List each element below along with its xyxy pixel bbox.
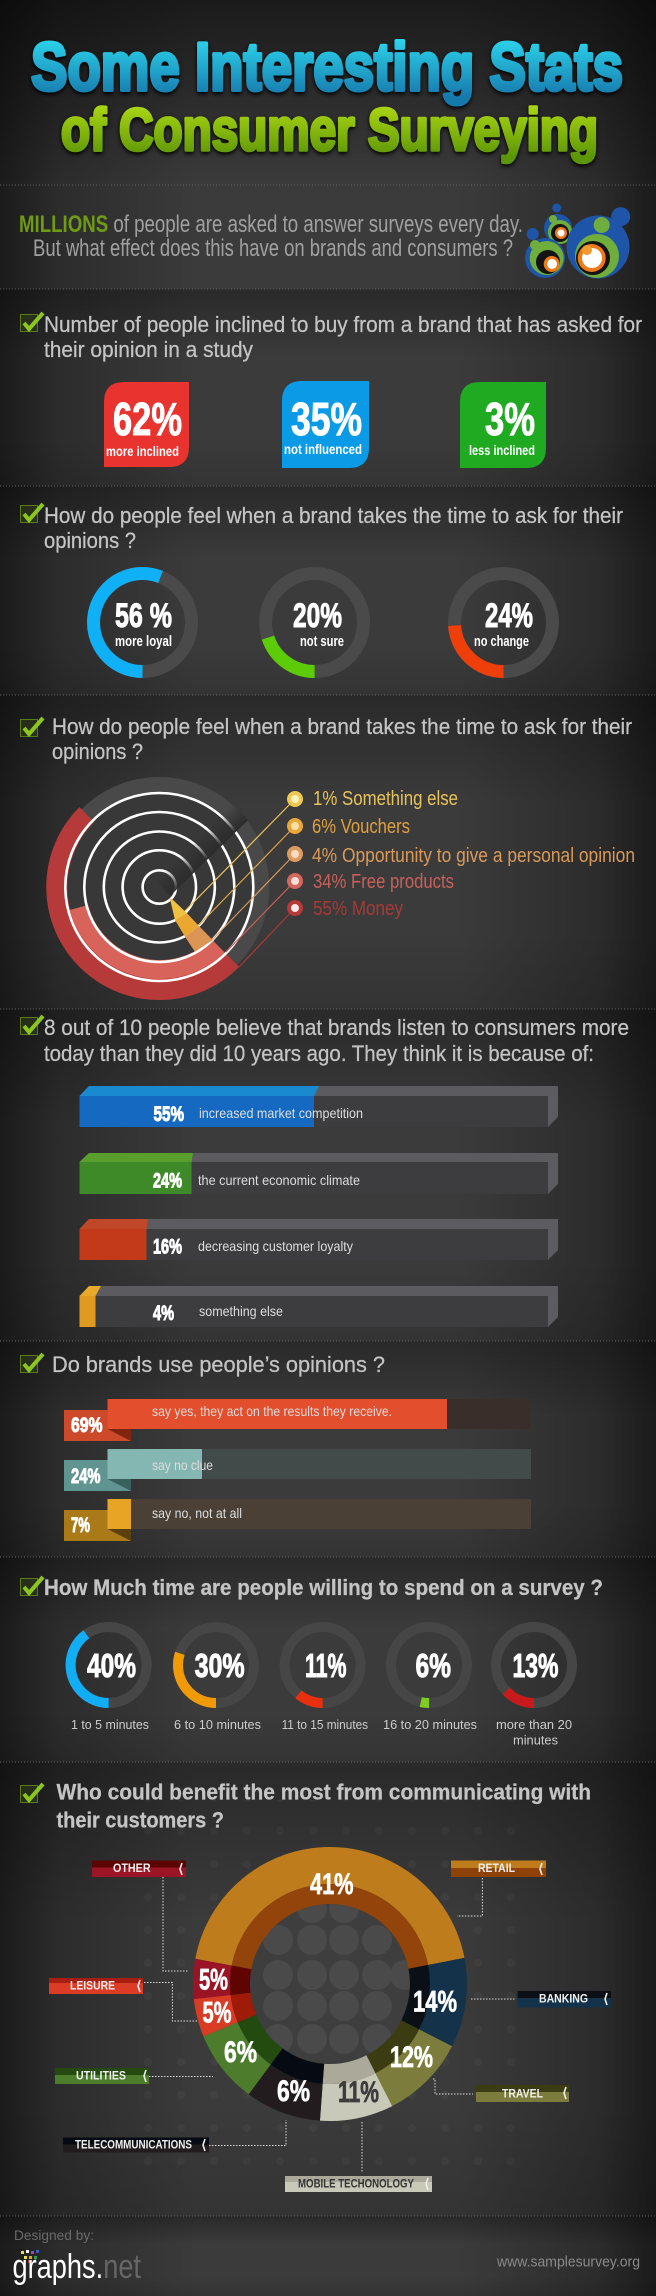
tile: 35% not influenced xyxy=(282,381,369,468)
donut chart: 5% xyxy=(202,1996,232,2030)
ring: 56% more loyal: 56 % xyxy=(115,597,172,635)
heading: How Much time are people willing to spend on a survey ? xyxy=(44,1575,603,1600)
donut chart xyxy=(199,1866,457,2109)
ring: 56% more loyal xyxy=(94,574,192,672)
ring: 40% xyxy=(71,1627,149,1732)
icon: check mark xyxy=(20,1354,43,1372)
ring: 40%: 1 to 5 minutes xyxy=(71,1717,149,1732)
ring: 11% xyxy=(282,1627,369,1732)
bar: 16%: decreasing customer loyalty xyxy=(198,1238,353,1254)
ring: 6%: 16 to 20 minutes xyxy=(383,1717,477,1732)
legend: 1% Something else xyxy=(313,788,458,810)
heading: opinions ? xyxy=(44,528,136,553)
heading xyxy=(44,503,623,553)
heading: Do brands use people’s opinions ? xyxy=(52,1352,385,1377)
ribbon: 69%: say yes, they act on the results they receive. xyxy=(152,1403,392,1419)
ring: 20% not sure xyxy=(266,574,364,672)
legend: 55% Money xyxy=(313,898,403,920)
bar: 55%: 55% xyxy=(154,1103,184,1126)
ring: 13% xyxy=(496,1627,572,1748)
bar: 4%: 4% xyxy=(153,1302,174,1325)
heading: How do people feel when a brand takes the time to ask for their xyxy=(52,714,632,739)
label: leisure: LEISURE xyxy=(70,1981,115,1993)
label: utilities xyxy=(55,2068,149,2084)
ring: 11%: 11 to 15 minutes xyxy=(282,1717,369,1732)
label: telecommunications: TELECOMMUNICATIONS xyxy=(75,2140,192,2152)
bar: 24%: the current economic climate xyxy=(198,1172,360,1188)
heading: Who could benefit the most from communicating with xyxy=(56,1780,591,1804)
panel: inclined to buy xyxy=(20,312,642,468)
ribbon: 7%: 7% xyxy=(71,1514,90,1537)
target chart xyxy=(49,777,295,997)
ribbon: 24%: say no clue xyxy=(152,1457,213,1473)
ring: 24% no change: 24% xyxy=(485,597,533,635)
label: mobile technology: MOBILE TECHONOLOGY xyxy=(298,2179,414,2191)
ring: 40%: 40% xyxy=(87,1647,136,1684)
ribbon: 69% xyxy=(64,1399,530,1441)
connector lines xyxy=(144,1877,516,2173)
heading: today than they did 10 years ago. They think it is because of: xyxy=(44,1041,594,1066)
heading: How do people feel when a brand takes the time to ask for their xyxy=(44,503,623,528)
tile: 3% less inclined: 3% xyxy=(485,393,535,445)
website: www.samplesurvey.org xyxy=(496,2254,640,2271)
icon: check mark xyxy=(20,1577,43,1596)
icon: check mark xyxy=(20,1016,43,1034)
legend: 34% Free products xyxy=(313,871,454,893)
tile: 3% less inclined: less inclined xyxy=(469,442,535,458)
heading xyxy=(44,312,642,362)
heading: their customers ? xyxy=(56,1808,224,1833)
panel: how people feel rings xyxy=(20,503,623,672)
ribbon: 24%: 24% xyxy=(71,1465,101,1488)
ring: 30% xyxy=(174,1627,261,1732)
bar: 16% xyxy=(80,1219,558,1260)
ring: 13%: more than 20 xyxy=(496,1717,572,1732)
label: travel xyxy=(476,2085,569,2102)
bar: 4%: something else xyxy=(199,1303,283,1319)
legend xyxy=(287,788,635,920)
panel: why brands listen xyxy=(20,1015,629,1327)
tile: 62% more inclined: more inclined xyxy=(106,443,179,459)
donut chart: 5% xyxy=(199,1964,228,1997)
panel: who could benefit xyxy=(20,1780,611,2192)
ribbon: 7% xyxy=(64,1499,531,1541)
icon: check mark xyxy=(20,1784,43,1802)
donut chart: 6% xyxy=(224,2036,257,2069)
tile: 62% more inclined xyxy=(104,382,189,467)
heading: 8 out of 10 people believe that brands listen to consumers more xyxy=(44,1015,629,1040)
label: utilities: UTILITIES xyxy=(76,2071,126,2083)
designer credit: Designed by: xyxy=(14,2227,94,2243)
ring: 13%: 13% xyxy=(512,1647,558,1684)
icon: check mark xyxy=(20,718,43,736)
bar: 24%: 24% xyxy=(153,1170,182,1192)
legend: 6% Vouchers xyxy=(312,816,410,838)
label: retail: RETAIL xyxy=(478,1863,515,1875)
label: retail xyxy=(451,1860,546,1877)
label: leisure xyxy=(49,1978,143,1994)
heading xyxy=(44,1015,629,1066)
ribbon: 7%: say no, not at all xyxy=(152,1505,242,1521)
donut chart: 41% xyxy=(310,1868,354,1901)
icon: people in survey circles xyxy=(525,204,630,278)
heading: their opinion in a study xyxy=(44,337,253,362)
icon: check mark xyxy=(20,504,43,522)
tile: 62% more inclined: 62% xyxy=(113,393,182,445)
ring: 56% more loyal: more loyal xyxy=(115,633,172,650)
title xyxy=(31,29,623,163)
intro text: MILLIONS of people are asked to answer surveys every day. xyxy=(19,211,523,238)
heading xyxy=(56,1780,591,1833)
bar: 55% xyxy=(80,1086,558,1127)
donut chart: 6% xyxy=(277,2075,310,2108)
tile: 35% not influenced: not influenced xyxy=(284,441,362,457)
ring: 20% not sure: not sure xyxy=(300,633,344,650)
bar: 4% xyxy=(80,1286,558,1327)
ring: 30%: 6 to 10 minutes xyxy=(174,1717,261,1732)
heading xyxy=(52,714,632,764)
label: other xyxy=(92,1860,186,1877)
panel: do brands use opinions xyxy=(20,1352,531,1541)
label: banking: BANKING xyxy=(539,1994,588,2006)
footer xyxy=(12,2227,640,2286)
label: banking xyxy=(518,1991,611,2008)
label: other: OTHER xyxy=(113,1863,151,1875)
label: mobile technology xyxy=(285,2176,432,2192)
ring: 6% xyxy=(383,1627,477,1732)
bar: 16%: 16% xyxy=(153,1236,182,1258)
tile: 3% less inclined xyxy=(460,382,546,468)
ribbon: 24% xyxy=(64,1449,531,1491)
bar: 55%: increased market competition xyxy=(199,1105,363,1121)
heading: opinions ? xyxy=(52,739,143,764)
donut chart: 11% xyxy=(338,2076,379,2109)
ring: 6%: 6% xyxy=(416,1647,451,1684)
label: travel: TRAVEL xyxy=(502,2089,543,2101)
tile: 35% not influenced: 35% xyxy=(291,393,362,445)
icon: check mark xyxy=(20,313,43,332)
ribbon: 69%: 69% xyxy=(71,1414,103,1437)
ring: 20% not sure: 20% xyxy=(293,597,342,635)
ring: 11%: 11% xyxy=(305,1647,346,1684)
donut chart: 12% xyxy=(390,2041,433,2074)
ring: 30%: 30% xyxy=(195,1647,245,1684)
panel: target chart xyxy=(20,714,635,997)
logo: graphs.net xyxy=(12,2248,141,2286)
donut chart: 14% xyxy=(413,1986,457,2019)
intro text: But what effect does this have on brands and consumers ? xyxy=(33,235,513,262)
ring: 24% no change: no change xyxy=(474,633,529,650)
bar: 24% xyxy=(80,1153,558,1194)
panel: time spent on a survey xyxy=(20,1575,603,1748)
intro text xyxy=(19,211,523,262)
ring: 24% no change xyxy=(454,574,552,672)
ring: 13%: minutes xyxy=(513,1732,558,1748)
